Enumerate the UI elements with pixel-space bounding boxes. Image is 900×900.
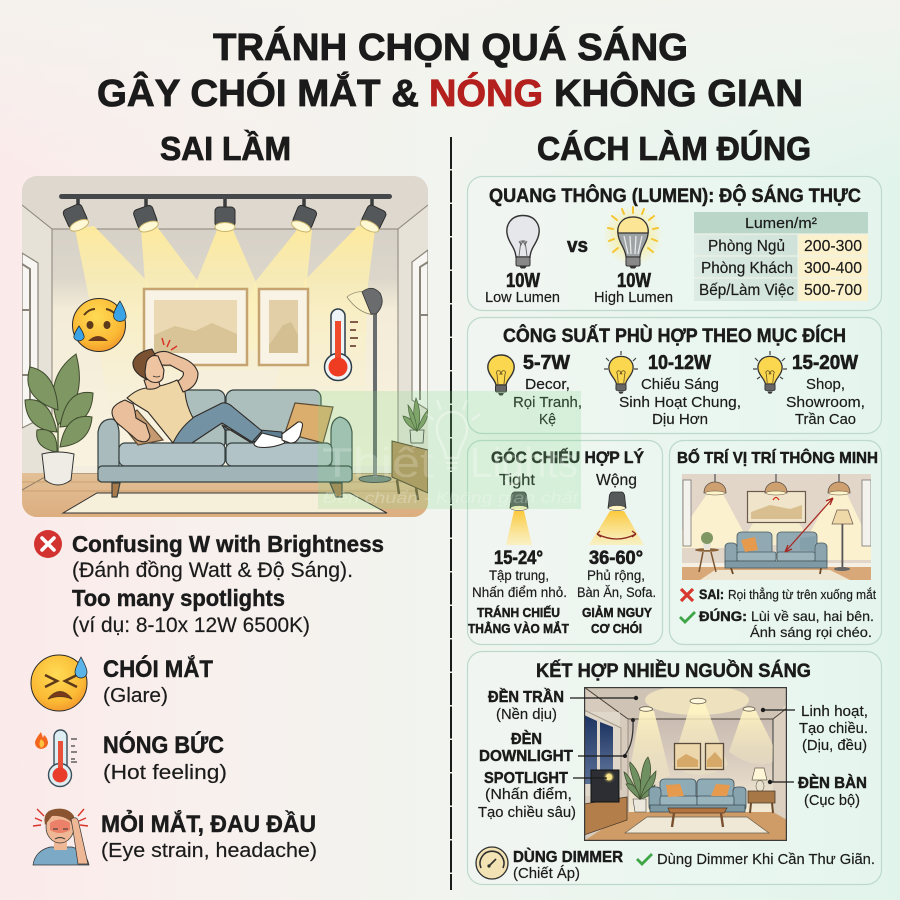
symptom: eye strain xyxy=(33,809,317,865)
callout: table lamp: ĐÈN BÀN xyxy=(798,773,867,792)
dimmer label: DÙNG DIMMER xyxy=(513,848,623,866)
low lumen label: 10W xyxy=(506,270,540,292)
spotlights xyxy=(62,203,387,235)
icon: thermometer xyxy=(324,309,358,380)
icon: dimmer dial xyxy=(476,847,508,879)
correct placement note: Ánh sáng rọi chéo. xyxy=(750,624,872,640)
callout: downlight xyxy=(479,729,627,765)
cushions xyxy=(120,403,333,445)
tight beam: Tập trung, xyxy=(489,568,549,583)
mistake list: wattage confusion xyxy=(34,530,384,637)
symptom: eye strain: MỎI MẮT, ĐAU ĐẦU xyxy=(101,809,316,838)
icon: red cross xyxy=(34,530,62,558)
dimmer tip: Dùng Dimmer Khi Cần Thư Giãn. xyxy=(657,851,875,868)
table: lumen per square metre: Phòng Ngủ xyxy=(708,238,785,255)
watermark xyxy=(318,391,581,509)
tight beam: Tight xyxy=(499,472,536,489)
light beams xyxy=(76,226,375,370)
dimmer label xyxy=(513,848,623,882)
callout: downlight: ĐÈN xyxy=(511,729,542,748)
high lumen label xyxy=(594,270,673,306)
option: 10-12W: Dịu Hơn xyxy=(652,411,708,428)
table: lumen per square metre: 300-400 xyxy=(804,260,862,277)
heading: KẾT HỢP NHIỀU NGUỒN SÁNG xyxy=(536,660,811,682)
tight beam: THẲNG VÀO MẮT xyxy=(468,621,569,636)
high lumen label: 10W xyxy=(617,270,651,292)
wide beam: Wộng xyxy=(596,472,637,489)
option: 5-7W: Kệ xyxy=(539,411,556,428)
low lumen label: Low Lumen xyxy=(485,290,560,306)
option: 5-7W xyxy=(488,352,582,428)
callout: ceiling light xyxy=(488,687,638,723)
option: 10-12W: Sinh Hoạt Chung, xyxy=(619,394,741,411)
panel: wattage by purpose xyxy=(468,318,882,434)
double arrow xyxy=(785,498,833,552)
illustration: room with several light sources xyxy=(584,685,787,841)
illustration: man on sofa under glaring spotlights xyxy=(22,176,428,517)
wrong placement note xyxy=(681,586,876,602)
option: 10-12W: Chiếu Sáng xyxy=(641,376,719,393)
tight beam xyxy=(468,472,569,636)
high lumen label: High Lumen xyxy=(594,290,673,306)
table: lumen per square metre: 500-700 xyxy=(804,282,862,299)
mistake list: wattage confusion: (Đánh đồng Watt & Độ Sáng). xyxy=(72,559,353,582)
option: 15-20W: Shop, xyxy=(806,376,845,393)
option: 15-20W xyxy=(753,351,865,428)
table: lumen per square metre: Bếp/Làm Việc xyxy=(699,282,794,299)
callout: flexible: Tạo chiều. xyxy=(799,721,868,737)
title: TRÁNH CHỌN QUÁ SÁNG xyxy=(213,25,688,69)
callout: flexible: (Dịu, đều) xyxy=(802,738,867,754)
tight beam: 15-24° xyxy=(494,548,543,569)
heading: sai lầm: SAI LẦM xyxy=(160,130,291,167)
emoji: worried sweating face xyxy=(72,298,126,352)
left window xyxy=(22,253,38,428)
callout: ceiling light: ĐỀN TRẦN xyxy=(488,687,564,706)
table: lumen per square metre xyxy=(694,212,868,301)
icon: dim bulb xyxy=(507,216,539,268)
icon: squinting face xyxy=(31,655,87,711)
option: 10-12W: 10-12W xyxy=(648,352,711,374)
watermark: Thiết xyxy=(322,439,434,486)
option: 5-7W: Decor, xyxy=(525,376,570,393)
symptom: glare: CHÓI MẮT xyxy=(103,655,213,683)
panel: layered lighting xyxy=(468,652,882,884)
callout: spotlight: SPOTLIGHT xyxy=(484,770,568,787)
panel: lumen xyxy=(468,176,882,310)
callout: downlight: DOWNLIGHT xyxy=(479,748,573,765)
wide beam: Bàn Ăn, Sofa. xyxy=(577,585,656,600)
sofa xyxy=(98,390,352,497)
illustration: living room with offset lights xyxy=(682,474,871,580)
icon: thermometer with flame xyxy=(35,730,77,786)
heading: QUANG THÔNG (LUMEN): ĐỘ SÁNG THỰC xyxy=(489,185,861,207)
option: 5-7W: 5-7W xyxy=(523,352,570,374)
panel: smart placement xyxy=(670,440,882,644)
framed pictures xyxy=(144,289,308,365)
heading: BỐ TRÍ VỊ TRÍ THÔNG MINH xyxy=(677,447,878,467)
heading: GÓC CHIẾU HỢP LÝ xyxy=(491,448,645,467)
table: lumen per square metre: 200-300 xyxy=(804,238,862,255)
icon: man with headache xyxy=(33,809,89,865)
title: GÂY CHÓI MẮT & xyxy=(97,71,419,115)
option: 15-20W: 15-20W xyxy=(792,352,858,374)
strain marks xyxy=(162,338,177,350)
symptom: eye strain: (Eye strain, headache) xyxy=(101,840,317,862)
table: lumen per square metre: Lumen/m² xyxy=(745,215,817,232)
title: KHÔNG GIAN xyxy=(554,70,803,115)
right window xyxy=(412,250,428,410)
floor lamp xyxy=(347,288,391,482)
callout: flexible: Linh hoạt, xyxy=(801,704,868,720)
right side cabinet with plant xyxy=(392,398,428,500)
symptom: glare: (Glare) xyxy=(103,685,168,707)
wide beam: GIẢM NGUY xyxy=(582,605,652,620)
callout: table lamp xyxy=(768,773,867,809)
symptom: hot feeling: (Hot feeling) xyxy=(103,762,227,784)
wide beam: CƠ CHÓI xyxy=(591,621,642,636)
symptom: hot feeling: NÓNG BỨC xyxy=(103,731,224,759)
icon: bright bulb xyxy=(603,206,663,268)
symptom: glare xyxy=(31,655,213,711)
mistake list: wattage confusion: Too many spotlights xyxy=(72,585,285,611)
plant xyxy=(25,354,93,485)
option: 15-20W: Showroom, xyxy=(786,394,865,411)
correct placement note xyxy=(680,607,874,640)
callout: ceiling light: (Nền dịu) xyxy=(496,707,557,723)
callout: spotlight: Tạo chiều sâu) xyxy=(478,805,576,821)
callout: spotlight xyxy=(478,770,607,821)
heading: CÔNG SUẤT PHÙ HỢP THEO MỤC ĐÍCH xyxy=(503,325,846,347)
watermark: Lights xyxy=(470,439,578,486)
floor xyxy=(22,473,428,517)
title xyxy=(97,25,803,115)
mistake list: wattage confusion: (ví dụ: 8-10x 12W 6500K) xyxy=(72,614,310,637)
option: 5-7W: Rọi Tranh, xyxy=(513,394,582,411)
callout: spotlight: (Nhấn điểm, xyxy=(485,787,572,803)
callout: flexible xyxy=(761,704,868,754)
correct placement note: Lùi về sau, hai bên. xyxy=(751,608,874,624)
mistake list: wattage confusion: Confusing W with Brightness xyxy=(72,531,384,557)
panel: beam angle xyxy=(468,440,662,644)
tight beam: Nhấn điểm nhỏ. xyxy=(472,585,567,600)
wide beam: 36-60° xyxy=(589,548,643,569)
option: 10-12W xyxy=(604,351,741,428)
correct placement note: ĐÚNG: xyxy=(699,607,747,624)
callout: table lamp: (Cục bộ) xyxy=(804,793,860,809)
title: NÓNG xyxy=(429,71,543,115)
symptom: hot feeling xyxy=(35,730,227,786)
heading: cách làm đúng: CÁCH LÀM ĐÚNG xyxy=(537,130,811,167)
wrong placement note: SAI: xyxy=(699,586,724,602)
watermark: Đèn chuẩn - Không gian chất xyxy=(323,489,579,507)
low lumen label xyxy=(485,270,560,306)
man lying on sofa, hand on forehead xyxy=(112,349,302,448)
vs: vs xyxy=(567,235,588,257)
wrong placement note: Rọi thẳng từ trên xuống mắt xyxy=(728,587,876,602)
option: 15-20W: Trần Cao xyxy=(795,411,856,428)
tight beam: TRÁNH CHIẾU xyxy=(477,605,560,620)
track rail xyxy=(59,194,392,207)
dimmer label: (Chiết Áp) xyxy=(513,865,580,882)
wide beam xyxy=(577,472,656,636)
table: lumen per square metre: Phòng Khách xyxy=(701,260,793,277)
wide beam: Phủ rộng, xyxy=(587,568,645,583)
